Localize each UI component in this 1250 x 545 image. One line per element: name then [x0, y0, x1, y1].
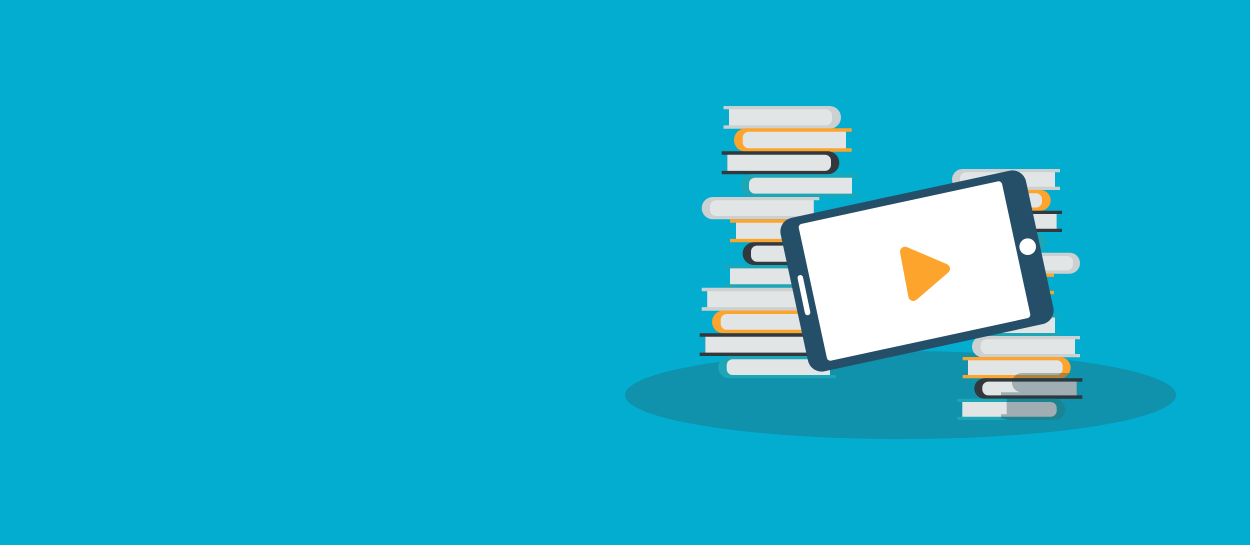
tablet	[778, 168, 1056, 374]
book: teal 4	[741, 174, 858, 197]
book: orange 6	[730, 219, 830, 242]
book: teal 8	[724, 265, 825, 288]
ground shadow ellipse	[625, 351, 1176, 439]
book: grey 1	[724, 106, 841, 129]
tablet home button	[1019, 238, 1036, 255]
illustration: books and tablet	[625, 106, 1176, 439]
left book stack	[700, 106, 858, 378]
book: orange R2	[960, 190, 1051, 211]
book: orange 10	[712, 310, 830, 333]
tablet speaker	[800, 278, 808, 312]
book: teal 12	[718, 356, 836, 378]
book: dark R3	[965, 211, 1062, 232]
book: grey R1	[952, 169, 1060, 190]
tablet body	[778, 168, 1056, 374]
shadow over right stack	[1001, 373, 1077, 420]
book: orange R9	[963, 357, 1071, 378]
book: grey R5	[950, 253, 1080, 274]
book: orange R6	[950, 274, 1054, 294]
book: dark 7	[743, 242, 830, 265]
tablet screen	[798, 181, 1031, 361]
book: orange 2	[734, 128, 852, 152]
book: dark 3	[722, 151, 839, 174]
icon: play button	[905, 252, 945, 296]
book: dark R10	[974, 378, 1082, 399]
book: grey 9	[702, 288, 830, 311]
book: dark 11	[700, 333, 840, 356]
right book stack	[950, 169, 1082, 420]
book: grey R8	[972, 336, 1080, 357]
book: teal R4	[960, 232, 1046, 253]
book: teal R7	[950, 314, 1059, 336]
book: grey 5	[702, 197, 819, 219]
book: teal R11	[957, 399, 1065, 420]
